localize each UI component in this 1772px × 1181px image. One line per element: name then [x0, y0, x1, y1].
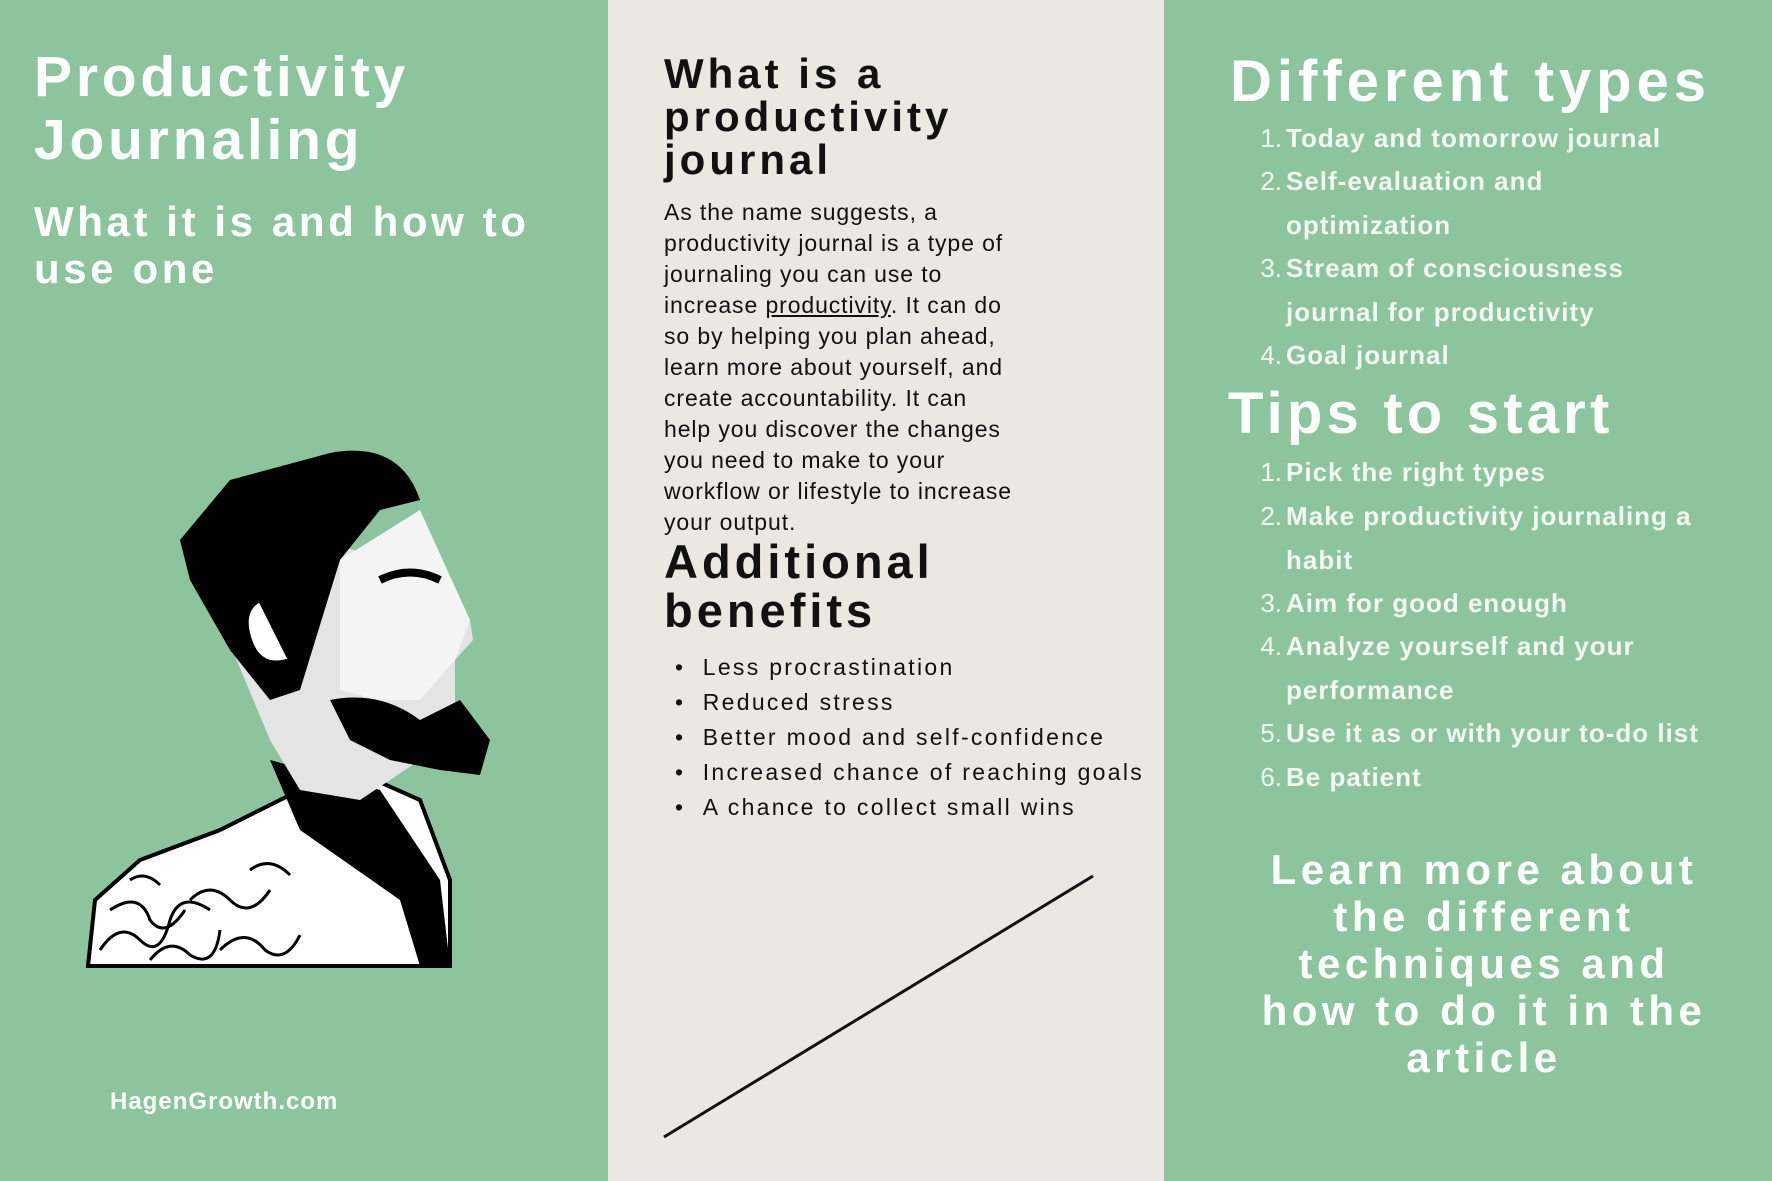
heading: additional benefits: benefits: [664, 584, 876, 637]
heading: additional benefits: [664, 535, 934, 637]
cta: how to do it in the: [1262, 987, 1706, 1034]
panel: middle: [608, 0, 1164, 1181]
text: 1.: [1260, 457, 1282, 487]
text: Use it as or with your to-do list: [1286, 718, 1699, 748]
text: Make productivity journaling a: [1286, 501, 1692, 531]
paragraph: create accountability. It can: [664, 385, 967, 411]
cta: the different: [1333, 893, 1635, 940]
text: 2.: [1260, 501, 1282, 531]
cta: Learn more about: [1271, 846, 1697, 893]
cta: article: [1406, 1034, 1562, 1081]
paragraph: help you discover the changes: [664, 416, 1001, 442]
text: 1.: [1260, 123, 1282, 153]
paragraph: your output.: [664, 509, 796, 535]
text: 2.: [1260, 166, 1282, 196]
title: Productivity: [34, 45, 409, 109]
paragraph: journaling you can use to: [664, 261, 942, 287]
heading: what is: [663, 50, 952, 183]
cta: techniques and: [1298, 940, 1670, 987]
subtitle: [34, 198, 530, 292]
paragraph: workflow or lifestyle to increase: [664, 478, 1012, 504]
title: Journaling: [34, 108, 363, 172]
text: habit: [1286, 544, 1353, 574]
text: 3.: [1260, 588, 1282, 618]
heading: what is: productivity: [664, 93, 952, 140]
text: Analyze yourself and your: [1286, 631, 1635, 661]
subtitle: use one: [34, 245, 218, 292]
benefits list: • Increased chance of reaching goals: [675, 759, 1144, 785]
text: 6.: [1260, 762, 1282, 792]
text: 3.: [1260, 253, 1282, 283]
text: performance: [1286, 674, 1454, 704]
diagonal line: [663, 874, 1094, 1138]
paragraph: [663, 199, 1012, 535]
text: Aim for good enough: [1286, 588, 1568, 618]
text: 5.: [1260, 718, 1282, 748]
illustration: man portrait: [86, 450, 490, 968]
paragraph: you need to make to your: [664, 447, 945, 473]
text: Goal journal: [1286, 340, 1450, 370]
text: Self-evaluation and: [1286, 166, 1543, 196]
text: Be patient: [1286, 762, 1422, 792]
panel: right: [1228, 49, 1711, 1081]
text: optimization: [1286, 210, 1451, 240]
paragraph: learn more about yourself, and: [664, 354, 1003, 380]
heading: different types: Different types: [1230, 49, 1711, 114]
panel: left: [0, 0, 608, 1181]
benefits list: • Better mood and self-confidence: [675, 724, 1105, 750]
text: Today and tomorrow journal: [1286, 123, 1661, 153]
benefits list: • Less procrastination: [675, 654, 955, 680]
text: Pick the right types: [1286, 457, 1546, 487]
paragraph: increase productivity. It can do: [664, 292, 1002, 318]
text: journal for productivity: [1286, 296, 1595, 326]
title: [34, 45, 409, 172]
cta: [1262, 846, 1706, 1081]
paragraph: so by helping you plan ahead,: [664, 323, 996, 349]
text: Stream of consciousness: [1286, 253, 1624, 283]
heading: additional benefits: Additional: [664, 535, 934, 588]
benefits list: [675, 654, 1144, 820]
paragraph: productivity journal is a type of: [664, 230, 1003, 256]
list: tips: [1260, 457, 1699, 792]
footer: website: HagenGrowth.com: [110, 1088, 338, 1115]
list: types: [1260, 123, 1661, 370]
paragraph: As the name suggests, a: [664, 199, 938, 225]
benefits list: • Reduced stress: [675, 689, 895, 715]
heading: what is: journal: [664, 136, 832, 183]
text: 4.: [1260, 340, 1282, 370]
benefits list: • A chance to collect small wins: [675, 794, 1076, 820]
heading: what is: What is a: [664, 50, 884, 97]
subtitle: What it is and how to: [34, 198, 530, 245]
heading: tips: Tips to start: [1228, 381, 1613, 446]
text: 4.: [1260, 631, 1282, 661]
